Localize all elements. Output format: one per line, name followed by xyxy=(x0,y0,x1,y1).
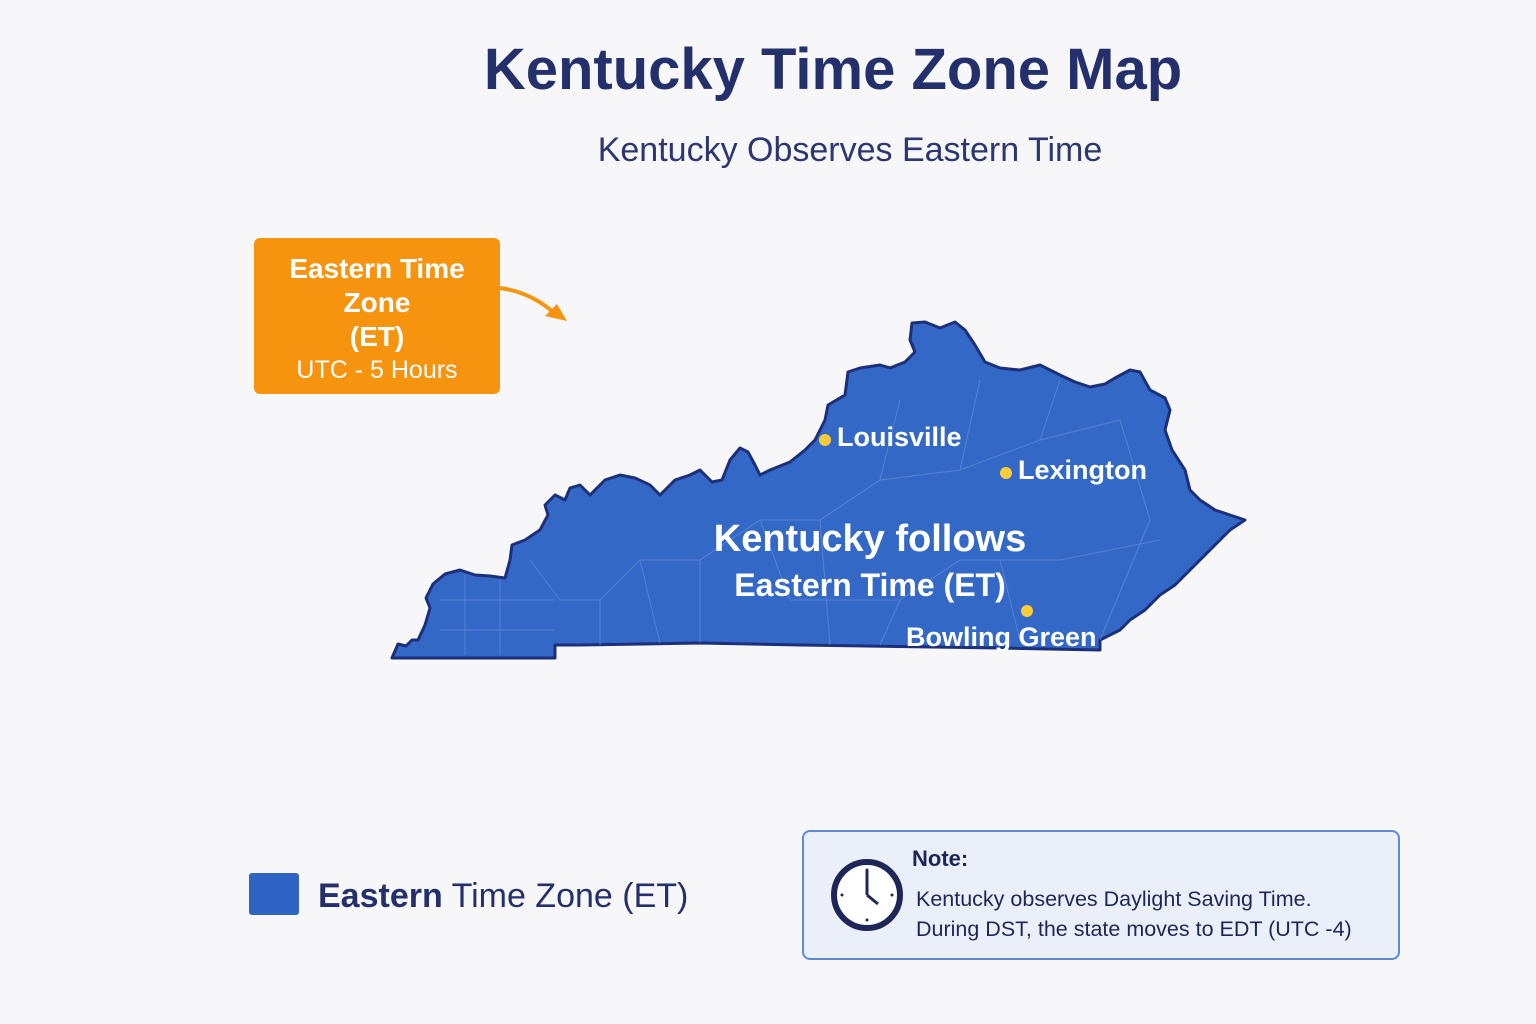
note box: Note: xyxy=(912,846,968,871)
note box: During DST, the state moves to EDT (UTC -4) xyxy=(916,917,1352,941)
callout: eastern time zone: (ET) xyxy=(350,321,404,352)
callout: eastern time zone xyxy=(254,238,500,394)
city: Lexington: Lexington xyxy=(1018,455,1147,485)
icon: clock xyxy=(831,859,903,931)
city: Bowling Green: Bowling Green xyxy=(906,622,1097,652)
arrow: callout to map xyxy=(500,286,567,321)
note box xyxy=(802,830,1400,960)
title: Kentucky Time Zone Map xyxy=(484,37,1182,102)
city: Louisville: Louisville xyxy=(837,422,962,452)
map label: Eastern Time (ET) xyxy=(734,567,1006,603)
callout: eastern time zone: Zone xyxy=(344,287,410,318)
subtitle: Kentucky Observes Eastern Time xyxy=(598,131,1102,169)
callout: eastern time zone: UTC - 5 Hours xyxy=(296,356,458,384)
map label: Kentucky follows xyxy=(714,518,1026,560)
note box: Kentucky observes Daylight Saving Time. xyxy=(916,887,1312,911)
legend: Eastern Time Zone (ET) xyxy=(318,877,688,915)
callout: eastern time zone: Eastern Time xyxy=(289,253,465,284)
city: Bowling Green xyxy=(906,605,1097,652)
map label xyxy=(714,518,1026,603)
